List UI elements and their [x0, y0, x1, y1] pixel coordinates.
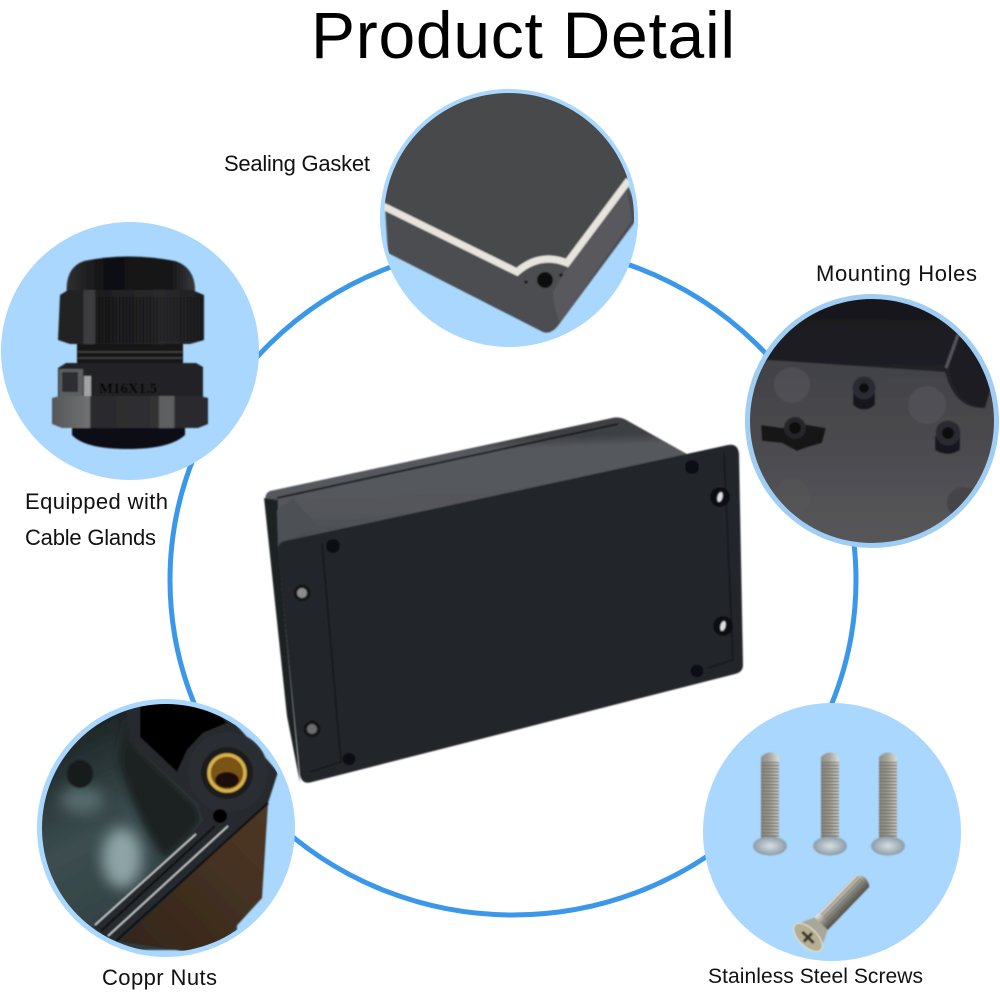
- enclosure lid side: [265, 417, 694, 552]
- thread base: [72, 426, 185, 449]
- copper nut photo: [37, 700, 278, 955]
- inner cavity: [37, 700, 237, 950]
- screw 2: [813, 752, 847, 856]
- lit chamfer on left of lid: [277, 498, 318, 543]
- screw 1: [753, 752, 787, 856]
- circle background: [745, 294, 999, 548]
- screw hole: [537, 272, 553, 288]
- dark shade beside frame: [116, 731, 203, 860]
- panel: stainless steel screws: [703, 703, 961, 961]
- brass insert: [209, 755, 245, 791]
- enclosure front flange: [278, 445, 743, 783]
- mounting holes: [294, 584, 310, 602]
- neck: [77, 340, 183, 368]
- enclosure side faces: [385, 183, 640, 333]
- gland flange: [52, 396, 208, 428]
- frame highlights: [95, 826, 228, 936]
- dome cap: [67, 256, 195, 296]
- black upper recess: [140, 700, 227, 772]
- screw 4 lying down: [789, 866, 878, 956]
- panel: cable gland: [1, 222, 259, 480]
- circle background: [703, 703, 961, 961]
- gasket photo: [384, 93, 634, 334]
- screw 3: [871, 752, 905, 856]
- lid seam: [277, 424, 618, 498]
- brown outer wall: [120, 803, 268, 955]
- enclosure left side: [264, 498, 300, 783]
- right pillar: [968, 402, 986, 406]
- lower hex nut: [58, 363, 203, 397]
- screws photo: [753, 752, 905, 956]
- circle background: [37, 699, 295, 957]
- label: equipped with cable glands: Equipped with: [25, 489, 168, 514]
- dark back wall: [766, 299, 990, 408]
- label: copper nuts: Coppr Nuts: [102, 965, 217, 990]
- mounting holes photo: [745, 295, 999, 550]
- white gasket line: [383, 180, 629, 272]
- label: stainless steel screws: Stainless Steel Screws: [708, 965, 923, 988]
- inner floor: [750, 359, 994, 543]
- label: mounting holes: Mounting Holes: [816, 261, 977, 286]
- sealing frame: [93, 700, 278, 942]
- lid top face: [384, 93, 628, 268]
- panel: sealing gasket: [380, 89, 638, 347]
- ribbed nut: [58, 290, 204, 344]
- size marking: M16X1.5: [99, 381, 157, 397]
- title: Product Detail: [311, 0, 735, 72]
- small hole: [213, 809, 227, 823]
- circle background: [1, 222, 259, 480]
- main product: black enclosure: [264, 417, 743, 783]
- label: equipped with cable glands: [25, 489, 168, 550]
- faint ejector marks: [774, 367, 979, 519]
- circle background: [380, 89, 638, 347]
- panel: copper nuts: [37, 699, 295, 957]
- corner screw recesses: [326, 539, 340, 553]
- standoff post right: [935, 434, 960, 454]
- nut boss: [216, 736, 266, 812]
- label: sealing gasket: Sealing Gasket: [224, 151, 370, 176]
- winged standoff: [761, 424, 826, 451]
- label: equipped with cable glands: Cable Glands: [25, 525, 156, 550]
- cable gland photo: [52, 256, 208, 449]
- connecting ring: [170, 245, 856, 915]
- standoff post top: [853, 390, 875, 410]
- panel: mounting holes: [745, 294, 999, 550]
- flange grooves: [310, 452, 733, 772]
